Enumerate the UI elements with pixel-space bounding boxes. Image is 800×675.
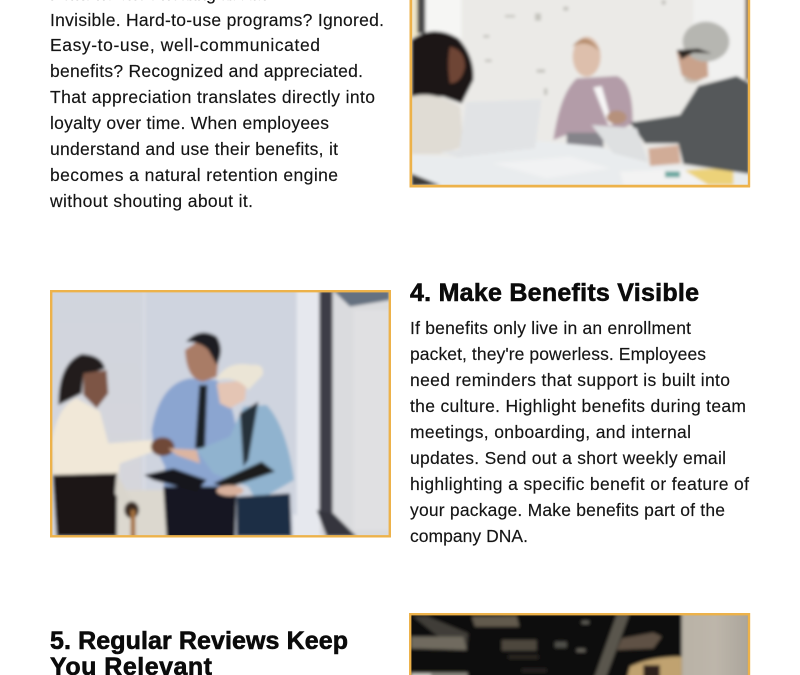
man right: [630, 76, 750, 174]
text block: section 3 body text: That appreciation translates directly into: [50, 87, 375, 107]
laptop: [452, 102, 539, 156]
woman left: [411, 31, 473, 103]
text block: section 4 body text: highlighting a specific benefit or feature of: [410, 474, 749, 494]
text block: section 3 body text: Easy-to-use, well-communicated: [50, 35, 320, 55]
text block: section 3 body text: [49, 0, 384, 211]
text block: section 4 body text: your package. Make benefits part of the: [410, 500, 725, 520]
text block: section 3 body text: without shouting about it.: [49, 191, 253, 211]
text block: section 4 body text: the culture. Highlight benefits during team: [410, 396, 746, 416]
text block: section 4 body text: updates. Send out a short weekly email: [410, 448, 726, 468]
handshake: [151, 437, 174, 456]
text block: section 5 heading: [50, 627, 348, 675]
text block: section 4 body text: meetings, onboarding, and internal: [410, 422, 691, 442]
text block: section 4 body text: company DNA.: [410, 526, 528, 546]
middle woman: [553, 76, 633, 140]
table: [564, 142, 603, 151]
text block: section 3 body text: benefits? Recognized and appreciated.: [50, 61, 363, 81]
text block: section 3 body text: understand and use their benefits, it: [50, 139, 338, 159]
text block: section 4 body text: If benefits only live in an enrollment: [410, 318, 691, 338]
text block: section 3 body text: loyalty over time. When employees: [50, 113, 329, 133]
folders: [144, 468, 207, 492]
tablet, hands, paper: [592, 125, 648, 162]
text block: section 3 body text: Invisible. Hard-to-use programs? Ignored.: [50, 10, 384, 30]
text block: section 4 body text: packet, they're powerless. Employees: [410, 344, 706, 364]
text block: section 4 body text: [410, 318, 749, 546]
text block: section 5 heading: 5. Regular Reviews Keep: [50, 627, 348, 655]
woman left: [52, 398, 153, 477]
photo: three colleagues at a meeting table: [407, 0, 753, 193]
text block: section 4 body text: need reminders that support is built into: [410, 370, 730, 390]
photo: three colleagues shaking hands by a window: [47, 287, 400, 543]
man: [152, 378, 237, 493]
photo: dark ceiling interior: [407, 613, 753, 675]
blonde woman: [197, 405, 294, 502]
text block: section 3 body text: becomes a natural retention engine: [50, 165, 338, 185]
text block: section 4 heading: 4. Make Benefits Visible: [410, 279, 699, 307]
